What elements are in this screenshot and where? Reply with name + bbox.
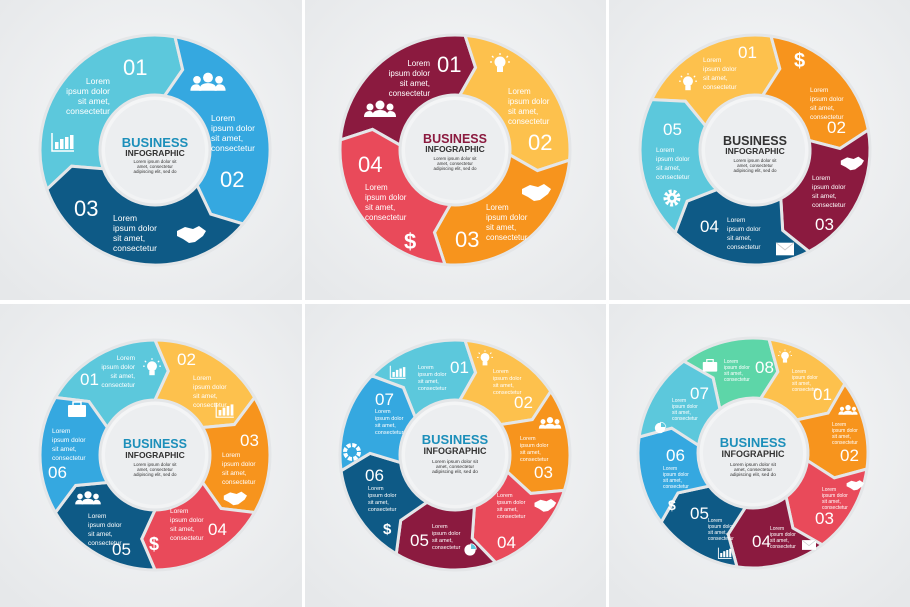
panel 4: six-step cycle: ipsum dolor [193, 384, 227, 391]
panel 6: eight-step cycle: 07 [690, 384, 709, 403]
panel 3: five-step cycle: consectetur [810, 114, 844, 121]
panel 6: eight-step cycle: Lorem [792, 369, 806, 375]
panel 4: six-step cycle: consectetur [101, 382, 136, 389]
panel 6: eight-step cycle: 03 [815, 509, 834, 528]
panel 4: six-step cycle: 06 [48, 463, 67, 482]
panel 4: six-step cycle: sit amet, [52, 446, 77, 453]
panel 5: seven-step cycle: consectetur [520, 457, 549, 463]
panel 6: eight-step cycle: Lorem [663, 466, 677, 472]
panel 3: five-step cycle: 02 [827, 118, 846, 137]
panel 5: seven-step cycle [319, 311, 601, 594]
panel 5: seven-step cycle: Lorem [497, 493, 513, 499]
panel 5: seven-step cycle: Lorem [418, 365, 434, 371]
panel 6: eight-step cycle: sit amet, [672, 410, 691, 416]
panel 2: four-step cycle: 03 [455, 227, 479, 252]
panel 5: seven-step cycle: consectetur [368, 507, 397, 513]
panel 6: eight-step cycle: ipsum dolor [708, 524, 734, 530]
panel 5: seven-step cycle: 01 [450, 358, 469, 377]
panel 4: six-step cycle: $ [149, 534, 159, 554]
panel 6: eight-step cycle: BUSINESS [720, 435, 787, 450]
panel 4: six-step cycle: ipsum dolor [88, 522, 122, 529]
panel 1: three-step cycle: adipiscing elit, sed do [133, 169, 177, 174]
panel 3: five-step cycle: Lorem [812, 175, 830, 182]
panel 1: three-step cycle: consectetur [66, 106, 110, 116]
panel 3: five-step cycle: Lorem [810, 87, 828, 94]
panel 4: six-step cycle: 03 [240, 431, 259, 450]
panel 2: four-step cycle: BUSINESS [423, 132, 487, 146]
panel 6: eight-step cycle: 01 [813, 385, 832, 404]
panel 2: four-step cycle: ipsum dolor [389, 69, 430, 78]
panel 1: three-step cycle: Lorem ipsum dolor sit [133, 159, 177, 164]
panel 6: eight-step cycle [612, 312, 894, 594]
panel 3: five-step cycle [596, 1, 887, 303]
panel 5: seven-step cycle: consectetur [375, 430, 404, 436]
panel 4: six-step cycle [6, 311, 304, 599]
panel 6: eight-step cycle: consectetur [708, 536, 734, 542]
panel 5: seven-step cycle: 02 [514, 393, 533, 412]
panel 6: eight-step cycle: consectetur [672, 416, 698, 422]
panel 3: five-step cycle: 03 [815, 215, 834, 234]
panel 2: four-step cycle: consectetur [486, 233, 528, 242]
panel 5: seven-step cycle: sit amet, [368, 500, 389, 506]
panel 3: five-step cycle: consectetur [727, 244, 761, 251]
panel 6: eight-step cycle: consectetur [832, 440, 858, 446]
panel 5: seven-step cycle: Lorem [368, 486, 384, 492]
panel 6: eight-step cycle: consectetur [663, 484, 689, 490]
panel 3: five-step cycle: ipsum dolor [812, 184, 846, 191]
panel 5: seven-step cycle: 03 [534, 463, 553, 482]
panel 6: eight-step cycle: ipsum dolor [832, 428, 858, 434]
panel 6: eight-step cycle: 02 [840, 446, 859, 465]
panel 2: four-step cycle: sit amet, [508, 107, 538, 116]
panel 5: seven-step cycle: 06 [365, 466, 384, 485]
panel 4: six-step cycle: sit amet, [193, 393, 218, 400]
panel 6: eight-step cycle: Lorem [770, 526, 784, 532]
panel 5: seven-step cycle: ipsum dolor [368, 493, 397, 499]
panel 6: eight-step cycle: ipsum dolor [724, 365, 750, 371]
panel 2: four-step cycle: sit amet, [486, 223, 516, 232]
panel 5: seven-step cycle: amet, consectetur [436, 464, 474, 470]
panel 4: six-step cycle: consectetur [222, 479, 256, 486]
panel 5: seven-step cycle: consectetur [493, 390, 522, 396]
panel 3: five-step cycle: BUSINESS [723, 134, 787, 148]
panel 6: eight-step cycle: sit amet, [832, 434, 851, 440]
panel 2: four-step cycle: ipsum dolor [486, 213, 528, 222]
panel 3: five-step cycle: ipsum dolor [727, 226, 761, 233]
panel 4: six-step cycle: 04 [208, 520, 227, 539]
panel 2: four-step cycle: Lorem [486, 203, 509, 212]
panel 4: six-step cycle: ipsum dolor [101, 364, 136, 371]
panel 5: seven-step cycle: sit amet, [432, 538, 453, 544]
panel 6: eight-step cycle: INFOGRAPHIC [722, 449, 785, 459]
panel 4: six-step cycle: consectetur [193, 402, 227, 409]
panel 4: six-step cycle: INFOGRAPHIC [125, 450, 185, 460]
panel 6: eight-step cycle: consectetur [792, 387, 818, 393]
panel 3: five-step cycle: sit amet, [812, 193, 837, 200]
panel 6: eight-step cycle: sit amet, [822, 499, 841, 505]
panel 3: five-step cycle: Lorem [656, 147, 674, 154]
panel 6: eight-step cycle: ipsum dolor [770, 532, 796, 538]
panel 6: eight-step cycle: Lorem [724, 359, 738, 365]
panel 1: three-step cycle: sit amet, [113, 233, 145, 243]
panel 1: three-step cycle: sit amet, [78, 96, 110, 106]
panel 3: five-step cycle: consectetur [812, 202, 846, 209]
panel 6: eight-step cycle: ipsum dolor [663, 472, 689, 478]
panel 2: four-step cycle [330, 25, 580, 275]
panel 2: four-step cycle: Lorem [508, 87, 531, 96]
panel 5: seven-step cycle: Lorem ipsum dolor sit [432, 459, 479, 465]
panel 4: six-step cycle: ipsum dolor [222, 461, 256, 468]
panel 3: five-step cycle: 05 [663, 120, 682, 139]
panel 2: four-step cycle: sit amet, [400, 79, 430, 88]
panel 6: eight-step cycle: Lorem [832, 422, 846, 428]
panel 5: seven-step cycle: ipsum dolor [375, 416, 404, 422]
panel 5: seven-step cycle: 07 [375, 390, 394, 409]
panel 2: four-step cycle: 02 [528, 130, 552, 155]
panel 2: four-step cycle: ipsum dolor [365, 193, 407, 202]
panel 5: seven-step cycle: 04 [497, 533, 516, 552]
panel 3: five-step cycle: ipsum dolor [656, 156, 690, 163]
panel 4: six-step cycle: Lorem [117, 355, 135, 362]
panel 5: seven-step cycle: ipsum dolor [520, 443, 549, 449]
panel 3: five-step cycle: 01 [738, 43, 757, 62]
panel 6: eight-step cycle: consectetur [724, 377, 750, 383]
panel 3: five-step cycle: Lorem [727, 217, 745, 224]
panel 3: five-step cycle: ipsum dolor [703, 66, 737, 73]
panel 5: seven-step cycle: consectetur [432, 545, 461, 551]
panel 5: seven-step cycle: 05 [410, 531, 429, 550]
panel 5: seven-step cycle: ipsum dolor [418, 372, 447, 378]
panel 5: seven-step cycle: sit amet, [375, 423, 396, 429]
panel 4: six-step cycle: Lorem [88, 513, 106, 520]
panel 4: six-step cycle: ipsum dolor [170, 517, 204, 524]
panel 4: six-step cycle: Lorem ipsum dolor sit [133, 462, 177, 467]
panel 6: eight-step cycle: sit amet, [792, 381, 811, 387]
panel 6: eight-step cycle: sit amet, [770, 538, 789, 544]
panel 5: seven-step cycle: Lorem [520, 436, 536, 442]
panel 4: six-step cycle: 02 [177, 350, 196, 369]
panel 3: five-step cycle: sit amet, [703, 75, 728, 82]
panel 5: seven-step cycle: ipsum dolor [493, 376, 522, 382]
panel 1: three-step cycle: consectetur [113, 243, 157, 253]
panel 6: eight-step cycle: ipsum dolor [822, 493, 848, 499]
panel 1: three-step cycle: ipsum dolor [211, 123, 255, 133]
panel 2: four-step cycle: INFOGRAPHIC [425, 144, 485, 154]
panel 6: eight-step cycle: ipsum dolor [672, 404, 698, 410]
panel 6: eight-step cycle: 08 [755, 358, 774, 377]
panel 1: three-step cycle: BUSINESS [122, 135, 189, 150]
panel 3: five-step cycle: sit amet, [810, 105, 835, 112]
panel 4: six-step cycle: 01 [80, 370, 99, 389]
panel 5: seven-step cycle: sit amet, [418, 379, 439, 385]
panel 1: three-step cycle: Lorem [211, 113, 235, 123]
panel 5: seven-step cycle: BUSINESS [422, 432, 489, 447]
panel 5: seven-step cycle: Lorem [432, 524, 448, 530]
panel 6: eight-step cycle: sit amet, [708, 530, 727, 536]
panel 6: eight-step cycle: 04 [752, 532, 771, 551]
panel 6: eight-step cycle: ipsum dolor [792, 375, 818, 381]
panel 6: eight-step cycle: Lorem ipsum dolor sit [730, 462, 777, 468]
panel 2: four-step cycle: ipsum dolor [508, 97, 550, 106]
panel 6: eight-step cycle: consectetur [822, 505, 848, 511]
panel 6: eight-step cycle: $ [668, 497, 676, 513]
panel 4: six-step cycle: Lorem [170, 508, 188, 515]
panel 3: five-step cycle: sit amet, [656, 165, 681, 172]
panel 1: three-step cycle: INFOGRAPHIC [125, 148, 185, 158]
panel 5: seven-step cycle: sit amet, [497, 507, 518, 513]
panel 2: four-step cycle: $ [404, 229, 416, 254]
panel 4: six-step cycle: Lorem [193, 375, 211, 382]
panel 5: seven-step cycle: sit amet, [493, 383, 514, 389]
panel 6: eight-step cycle: Lorem [672, 398, 686, 404]
panel 3: five-step cycle: 04 [700, 217, 719, 236]
panel 3: five-step cycle: consectetur [656, 174, 690, 181]
panel 1: three-step cycle: sit amet, [211, 133, 243, 143]
panel 4: six-step cycle: BUSINESS [123, 437, 187, 451]
panel 1: three-step cycle: Lorem [86, 76, 110, 86]
panel 1: three-step cycle [8, 22, 288, 312]
panel 2: four-step cycle: Lorem ipsum dolor sit [433, 156, 477, 161]
panel 6: eight-step cycle: Lorem [822, 487, 836, 493]
panel 4: six-step cycle: consectetur [170, 535, 204, 542]
panel 3: five-step cycle: ipsum dolor [810, 96, 844, 103]
panel 4: six-step cycle: sit amet, [222, 470, 247, 477]
panel 5: seven-step cycle: Lorem [375, 409, 391, 415]
panel 2: four-step cycle: consectetur [508, 117, 550, 126]
panel 6: eight-step cycle: consectetur [770, 544, 796, 550]
panel 4: six-step cycle: consectetur [88, 540, 122, 547]
panel 4: six-step cycle: Lorem [222, 452, 240, 459]
panel 5: seven-step cycle: sit amet, [520, 450, 541, 456]
panel 2: four-step cycle: adipiscing elit, sed do [433, 166, 477, 171]
panel 4: six-step cycle: ipsum dolor [52, 437, 86, 444]
panel 4: six-step cycle: 05 [112, 540, 131, 559]
panel 2: four-step cycle: Lorem [365, 183, 388, 192]
panel 2: four-step cycle: amet, consectetur [437, 161, 473, 166]
panel 1: three-step cycle: ipsum dolor [113, 223, 157, 233]
panel 1: three-step cycle: ipsum dolor [66, 86, 110, 96]
panel 3: five-step cycle: $ [794, 50, 805, 72]
panel 4: six-step cycle: amet, consectetur [137, 467, 173, 472]
panel 1: three-step cycle: amet, consectetur [137, 164, 173, 169]
panel 4: six-step cycle: Lorem [52, 428, 70, 435]
panel 2: four-step cycle: consectetur [389, 89, 430, 98]
panel 5: seven-step cycle: INFOGRAPHIC [424, 446, 487, 456]
panel 5: seven-step cycle: adipiscing elit, sed do [432, 469, 478, 475]
panel 3: five-step cycle: Lorem ipsum dolor sit [733, 158, 777, 163]
panel 6: eight-step cycle: sit amet, [724, 371, 743, 377]
panel 6: eight-step cycle: 05 [690, 504, 709, 523]
panel 1: three-step cycle: consectetur [211, 143, 255, 153]
panel 2: four-step cycle: Lorem [407, 59, 430, 68]
panel 2: four-step cycle: 01 [437, 52, 461, 77]
panel 5: seven-step cycle: consectetur [418, 386, 447, 392]
panel 1: three-step cycle: Lorem [113, 213, 137, 223]
panel 4: six-step cycle: sit amet, [88, 531, 113, 538]
panel 6: eight-step cycle: Lorem [708, 518, 722, 524]
panel 5: seven-step cycle: ipsum dolor [432, 531, 461, 537]
panel 1: three-step cycle: 01 [123, 55, 147, 80]
panel 1: three-step cycle: 03 [74, 196, 98, 221]
panel 1: three-step cycle: 02 [220, 167, 244, 192]
panel 5: seven-step cycle: consectetur [497, 514, 526, 520]
panel 6: eight-step cycle: 06 [666, 446, 685, 465]
panel 5: seven-step cycle: $ [383, 521, 392, 538]
panel 3: five-step cycle: INFOGRAPHIC [725, 146, 785, 156]
panel 2: four-step cycle: consectetur [365, 213, 407, 222]
panel 4: six-step cycle: adipiscing elit, sed do [133, 472, 177, 477]
panel 6: eight-step cycle: sit amet, [663, 478, 682, 484]
panel 6: eight-step cycle: amet, consectetur [734, 467, 772, 473]
panel 3: five-step cycle: amet, consectetur [737, 163, 773, 168]
panel 3: five-step cycle: sit amet, [727, 235, 752, 242]
panel 3: five-step cycle: adipiscing elit, sed do [733, 168, 777, 173]
panel 6: eight-step cycle: adipiscing elit, sed do [730, 472, 776, 478]
panel 4: six-step cycle: consectetur [52, 455, 86, 462]
panel 5: seven-step cycle: Lorem [493, 369, 509, 375]
panel 2: four-step cycle: sit amet, [365, 203, 395, 212]
panel 4: six-step cycle: sit amet, [170, 526, 195, 533]
panel 3: five-step cycle: Lorem [703, 57, 721, 64]
panel 3: five-step cycle: consectetur [703, 84, 737, 91]
panel 5: seven-step cycle: ipsum dolor [497, 500, 526, 506]
panel 2: four-step cycle: 04 [358, 152, 382, 177]
panel 4: six-step cycle: sit amet, [110, 373, 135, 380]
